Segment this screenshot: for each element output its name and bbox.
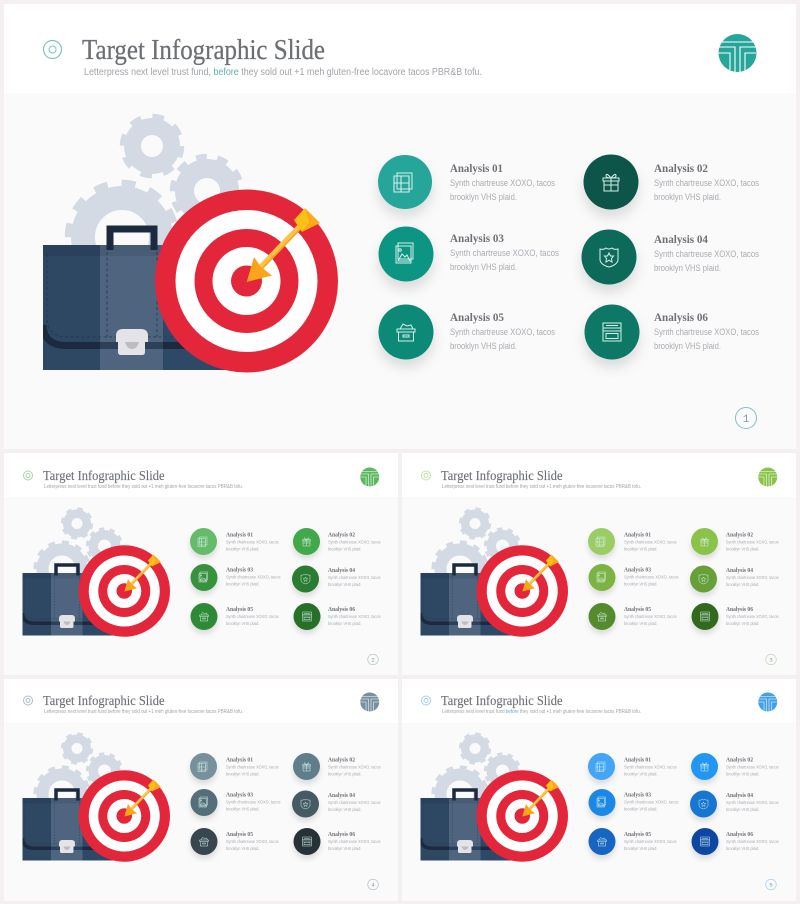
item: Analysis 01: Analysis 01 — [226, 532, 253, 538]
item: Analysis 05 — [588, 828, 677, 855]
item: Analysis 02: Synth chartreuse XOXO, tacos — [654, 178, 759, 188]
item: Analysis 06: Synth chartreuse XOXO, tacos — [726, 614, 779, 619]
icon: brand logo — [758, 692, 777, 712]
icon: brand logo — [360, 692, 379, 712]
item: Analysis 06: Synth chartreuse XOXO, tacos — [654, 327, 759, 337]
item: Analysis 02 — [691, 528, 779, 555]
item: Analysis 06 — [692, 603, 779, 630]
item: Analysis 04: Synth chartreuse XOXO, tacos — [726, 800, 779, 805]
item: Analysis 05 — [378, 304, 555, 360]
item: Analysis 04: Synth chartreuse XOXO, tacos — [726, 575, 779, 580]
title: Target Infographic Slide — [441, 694, 562, 709]
item: Analysis 06: brooklyn VHS plaid. — [654, 341, 721, 351]
item: Analysis 04 — [690, 790, 779, 818]
item: Analysis 02: Analysis 02 — [328, 532, 355, 538]
page number — [766, 654, 776, 665]
item: Analysis 06 — [294, 603, 381, 630]
item: Analysis 05 — [190, 603, 279, 630]
item: Analysis 05: Synth chartreuse XOXO, tacos — [226, 614, 279, 619]
item: Analysis 03: Analysis 03 — [624, 568, 651, 574]
item: Analysis 06: Analysis 06 — [726, 832, 753, 838]
title: Target Infographic Slide — [82, 35, 325, 66]
item: Analysis 01: Synth chartreuse XOXO, tacos — [226, 764, 279, 770]
item: Analysis 03: brooklyn VHS plaid. — [450, 262, 517, 272]
slide body — [402, 453, 796, 675]
item: Analysis 01: brooklyn VHS plaid. — [226, 546, 260, 552]
slide header band — [4, 4, 796, 93]
subtitle: Letterpress next level trust fund before they sold out +1 meh gluten-free locavore tacos PBR&B tofu. — [44, 709, 243, 715]
title: Target Infographic Slide — [441, 469, 562, 484]
illustration: gears, briefcase and target with arrow — [420, 508, 568, 637]
item: Analysis 01: Synth chartreuse XOXO, tacos — [624, 764, 677, 770]
item: Analysis 03 — [190, 789, 281, 816]
item: Analysis 03: Synth chartreuse XOXO, tacos — [450, 248, 559, 258]
page number — [766, 879, 776, 890]
item: Analysis 04: brooklyn VHS plaid. — [726, 807, 760, 812]
item: Analysis 02: brooklyn VHS plaid. — [726, 546, 760, 552]
item: Analysis 02: Synth chartreuse XOXO, tacos — [726, 764, 779, 770]
item: Analysis 05: Synth chartreuse XOXO, tacos — [226, 839, 279, 844]
item: Analysis 04: Synth chartreuse XOXO, tacos — [654, 249, 759, 259]
item: Analysis 04 — [582, 230, 759, 284]
item: Analysis 01: brooklyn VHS plaid. — [624, 772, 658, 776]
panel: green slide — [4, 453, 398, 675]
item: Analysis 03 — [588, 564, 679, 591]
item: Analysis 01: brooklyn VHS plaid. — [226, 772, 260, 776]
slide body — [4, 679, 398, 901]
item: Analysis 03: Analysis 03 — [624, 792, 651, 798]
item: Analysis 02 — [293, 753, 381, 780]
panel: slate slide — [4, 679, 398, 901]
item: Analysis 05: Analysis 05 — [624, 607, 651, 613]
item: Analysis 04 — [292, 566, 381, 592]
item: Analysis 03 — [588, 789, 679, 816]
item: Analysis 03: Analysis 03 — [450, 231, 504, 245]
item: Analysis 06 — [692, 828, 779, 855]
item: Analysis 05: Synth chartreuse XOXO, tacos — [624, 614, 677, 619]
item: Analysis 02 — [293, 528, 381, 555]
item: Analysis 03: brooklyn VHS plaid. — [624, 582, 658, 586]
illustration: gears, briefcase and target with arrow — [22, 508, 170, 637]
item: Analysis 03: Synth chartreuse XOXO, tacos — [226, 574, 281, 580]
subtitle: Letterpress next level trust fund before they sold out +1 meh gluten-free locavore tacos PBR&B tofu. — [44, 484, 243, 490]
item: Analysis 01: Analysis 01 — [624, 758, 651, 764]
item: Analysis 01 — [588, 753, 677, 780]
item: Analysis 06: brooklyn VHS plaid. — [328, 621, 362, 626]
illustration: gears, briefcase and target with arrow — [420, 734, 568, 862]
item: Analysis 03: brooklyn VHS plaid. — [624, 806, 658, 812]
item: Analysis 04: Analysis 04 — [328, 793, 355, 799]
item: Analysis 05: Analysis 05 — [624, 832, 651, 838]
slide header band — [4, 453, 398, 497]
item: Analysis 01: brooklyn VHS plaid. — [450, 192, 517, 202]
item: Analysis 04 — [292, 790, 381, 818]
item: Analysis 06: Analysis 06 — [654, 310, 708, 324]
item: Analysis 02: Analysis 02 — [654, 161, 708, 175]
title: Target Infographic Slide — [43, 694, 164, 709]
item: Analysis 05 — [588, 603, 677, 630]
icon: target mark — [44, 40, 62, 58]
item: Analysis 02: Analysis 02 — [726, 758, 753, 764]
item: Analysis 03 — [190, 564, 281, 591]
page number: 4 — [371, 882, 375, 888]
item: Analysis 04: Analysis 04 — [726, 568, 753, 574]
icon: target mark — [24, 471, 32, 480]
page number — [368, 654, 378, 665]
icon: brand logo — [360, 468, 379, 486]
item: Analysis 01: Analysis 01 — [450, 161, 503, 175]
item: Analysis 01: Analysis 01 — [226, 758, 253, 764]
item: Analysis 06: brooklyn VHS plaid. — [328, 846, 362, 851]
item: Analysis 01 — [190, 753, 279, 780]
panel: light green slide — [402, 453, 796, 675]
page number: 2 — [371, 656, 375, 664]
item: Analysis 03: Synth chartreuse XOXO, tacos — [226, 800, 281, 804]
page number: 5 — [769, 882, 773, 888]
item: Analysis 05: Synth chartreuse XOXO, tacos — [624, 839, 677, 844]
item: Analysis 04: brooklyn VHS plaid. — [654, 263, 721, 273]
item: Analysis 02: Synth chartreuse XOXO, tacos — [328, 540, 381, 544]
icon: target mark — [422, 471, 430, 480]
subtitle: Letterpress next level trust fund before they sold out +1 meh gluten-free locavore tacos PBR&B tofu. — [442, 709, 641, 715]
item: Analysis 04: brooklyn VHS plaid. — [328, 807, 362, 812]
item: Analysis 03: brooklyn VHS plaid. — [226, 582, 260, 586]
slide body — [402, 679, 796, 901]
item: Analysis 06: Synth chartreuse XOXO, tacos — [726, 839, 779, 844]
item: Analysis 05: brooklyn VHS plaid. — [226, 846, 260, 851]
item: Analysis 02: Synth chartreuse XOXO, tacos — [328, 764, 381, 770]
page number: 3 — [769, 656, 773, 664]
item: Analysis 05: brooklyn VHS plaid. — [624, 846, 658, 851]
panel: main teal slide — [4, 4, 796, 449]
icon: target mark — [24, 696, 32, 705]
item: Analysis 03 — [378, 226, 559, 282]
item: Analysis 06: Analysis 06 — [328, 832, 355, 838]
item: Analysis 03: brooklyn VHS plaid. — [226, 806, 260, 812]
illustration: gears, briefcase and target with arrow — [43, 116, 338, 372]
item: Analysis 02: Analysis 02 — [726, 532, 753, 538]
slide header band — [4, 679, 398, 723]
item: Analysis 02: brooklyn VHS plaid. — [328, 772, 362, 776]
slide body — [4, 453, 398, 675]
item: Analysis 05: Analysis 05 — [226, 607, 253, 613]
item: Analysis 02: brooklyn VHS plaid. — [654, 192, 721, 202]
item: Analysis 01 — [588, 528, 677, 555]
item: Analysis 01: Synth chartreuse XOXO, tacos — [450, 178, 555, 188]
item: Analysis 01 — [190, 528, 279, 555]
item: Analysis 06: Analysis 06 — [726, 607, 753, 613]
page number — [736, 408, 756, 428]
item: Analysis 02 — [584, 154, 759, 210]
item: Analysis 05: brooklyn VHS plaid. — [226, 621, 260, 626]
item: Analysis 04: Analysis 04 — [726, 793, 753, 799]
item: Analysis 06: brooklyn VHS plaid. — [726, 846, 760, 851]
item: Analysis 01: Synth chartreuse XOXO, tacos — [226, 540, 279, 544]
item: Analysis 02: Analysis 02 — [328, 758, 355, 764]
slide header band — [402, 679, 796, 723]
item: Analysis 01: Analysis 01 — [624, 532, 651, 538]
item: Analysis 03: Synth chartreuse XOXO, tacos — [624, 800, 679, 804]
item: Analysis 05: brooklyn VHS plaid. — [450, 341, 517, 351]
item: Analysis 01 — [378, 155, 555, 209]
item: Analysis 04: Synth chartreuse XOXO, tacos — [328, 575, 381, 580]
item: Analysis 05: Analysis 05 — [450, 310, 504, 324]
item: Analysis 02: brooklyn VHS plaid. — [328, 546, 362, 552]
item: Analysis 05: Synth chartreuse XOXO, tacos — [450, 327, 555, 337]
item: Analysis 04 — [690, 566, 779, 592]
page number: 1 — [743, 414, 750, 426]
item: Analysis 05: Analysis 05 — [226, 832, 253, 838]
item: Analysis 03: Analysis 03 — [226, 792, 253, 798]
panel: blue slide — [402, 679, 796, 901]
illustration: gears, briefcase and target with arrow — [22, 734, 170, 862]
item: Analysis 06: Synth chartreuse XOXO, tacos — [328, 614, 381, 619]
item: Analysis 04: Synth chartreuse XOXO, tacos — [328, 800, 381, 805]
item: Analysis 03: Synth chartreuse XOXO, tacos — [624, 574, 679, 580]
title: Target Infographic Slide — [43, 469, 164, 484]
item: Analysis 04: Analysis 04 — [328, 568, 355, 574]
item: Analysis 06: Synth chartreuse XOXO, tacos — [328, 839, 381, 844]
item: Analysis 04: brooklyn VHS plaid. — [726, 582, 760, 587]
item: Analysis 02: Synth chartreuse XOXO, tacos — [726, 540, 779, 544]
item: Analysis 05 — [190, 828, 279, 855]
subtitle: Letterpress next level trust fund before they sold out +1 meh gluten-free locavore tacos PBR&B tofu. — [442, 484, 641, 490]
slide body — [4, 4, 796, 449]
slide header band — [402, 453, 796, 497]
item: Analysis 02: brooklyn VHS plaid. — [726, 772, 760, 776]
item: Analysis 01: brooklyn VHS plaid. — [624, 546, 658, 552]
item: Analysis 06: brooklyn VHS plaid. — [726, 621, 760, 626]
item: Analysis 01: Synth chartreuse XOXO, tacos — [624, 540, 677, 544]
item: Analysis 06 — [294, 828, 381, 855]
icon: target mark — [422, 696, 430, 705]
page number — [368, 879, 378, 890]
subtitle: Letterpress next level trust fund, before they sold out +1 meh gluten-free locavore tacos PBR&B tofu. — [84, 67, 482, 78]
icon: brand logo — [758, 468, 777, 486]
item: Analysis 03: Analysis 03 — [226, 568, 253, 574]
icon: brand logo — [718, 34, 756, 72]
item: Analysis 06 — [584, 304, 759, 360]
item: Analysis 05: brooklyn VHS plaid. — [624, 621, 658, 626]
item: Analysis 04: brooklyn VHS plaid. — [328, 582, 362, 587]
item: Analysis 06: Analysis 06 — [328, 607, 355, 613]
item: Analysis 04: Analysis 04 — [654, 232, 708, 246]
item: Analysis 02 — [691, 753, 779, 780]
